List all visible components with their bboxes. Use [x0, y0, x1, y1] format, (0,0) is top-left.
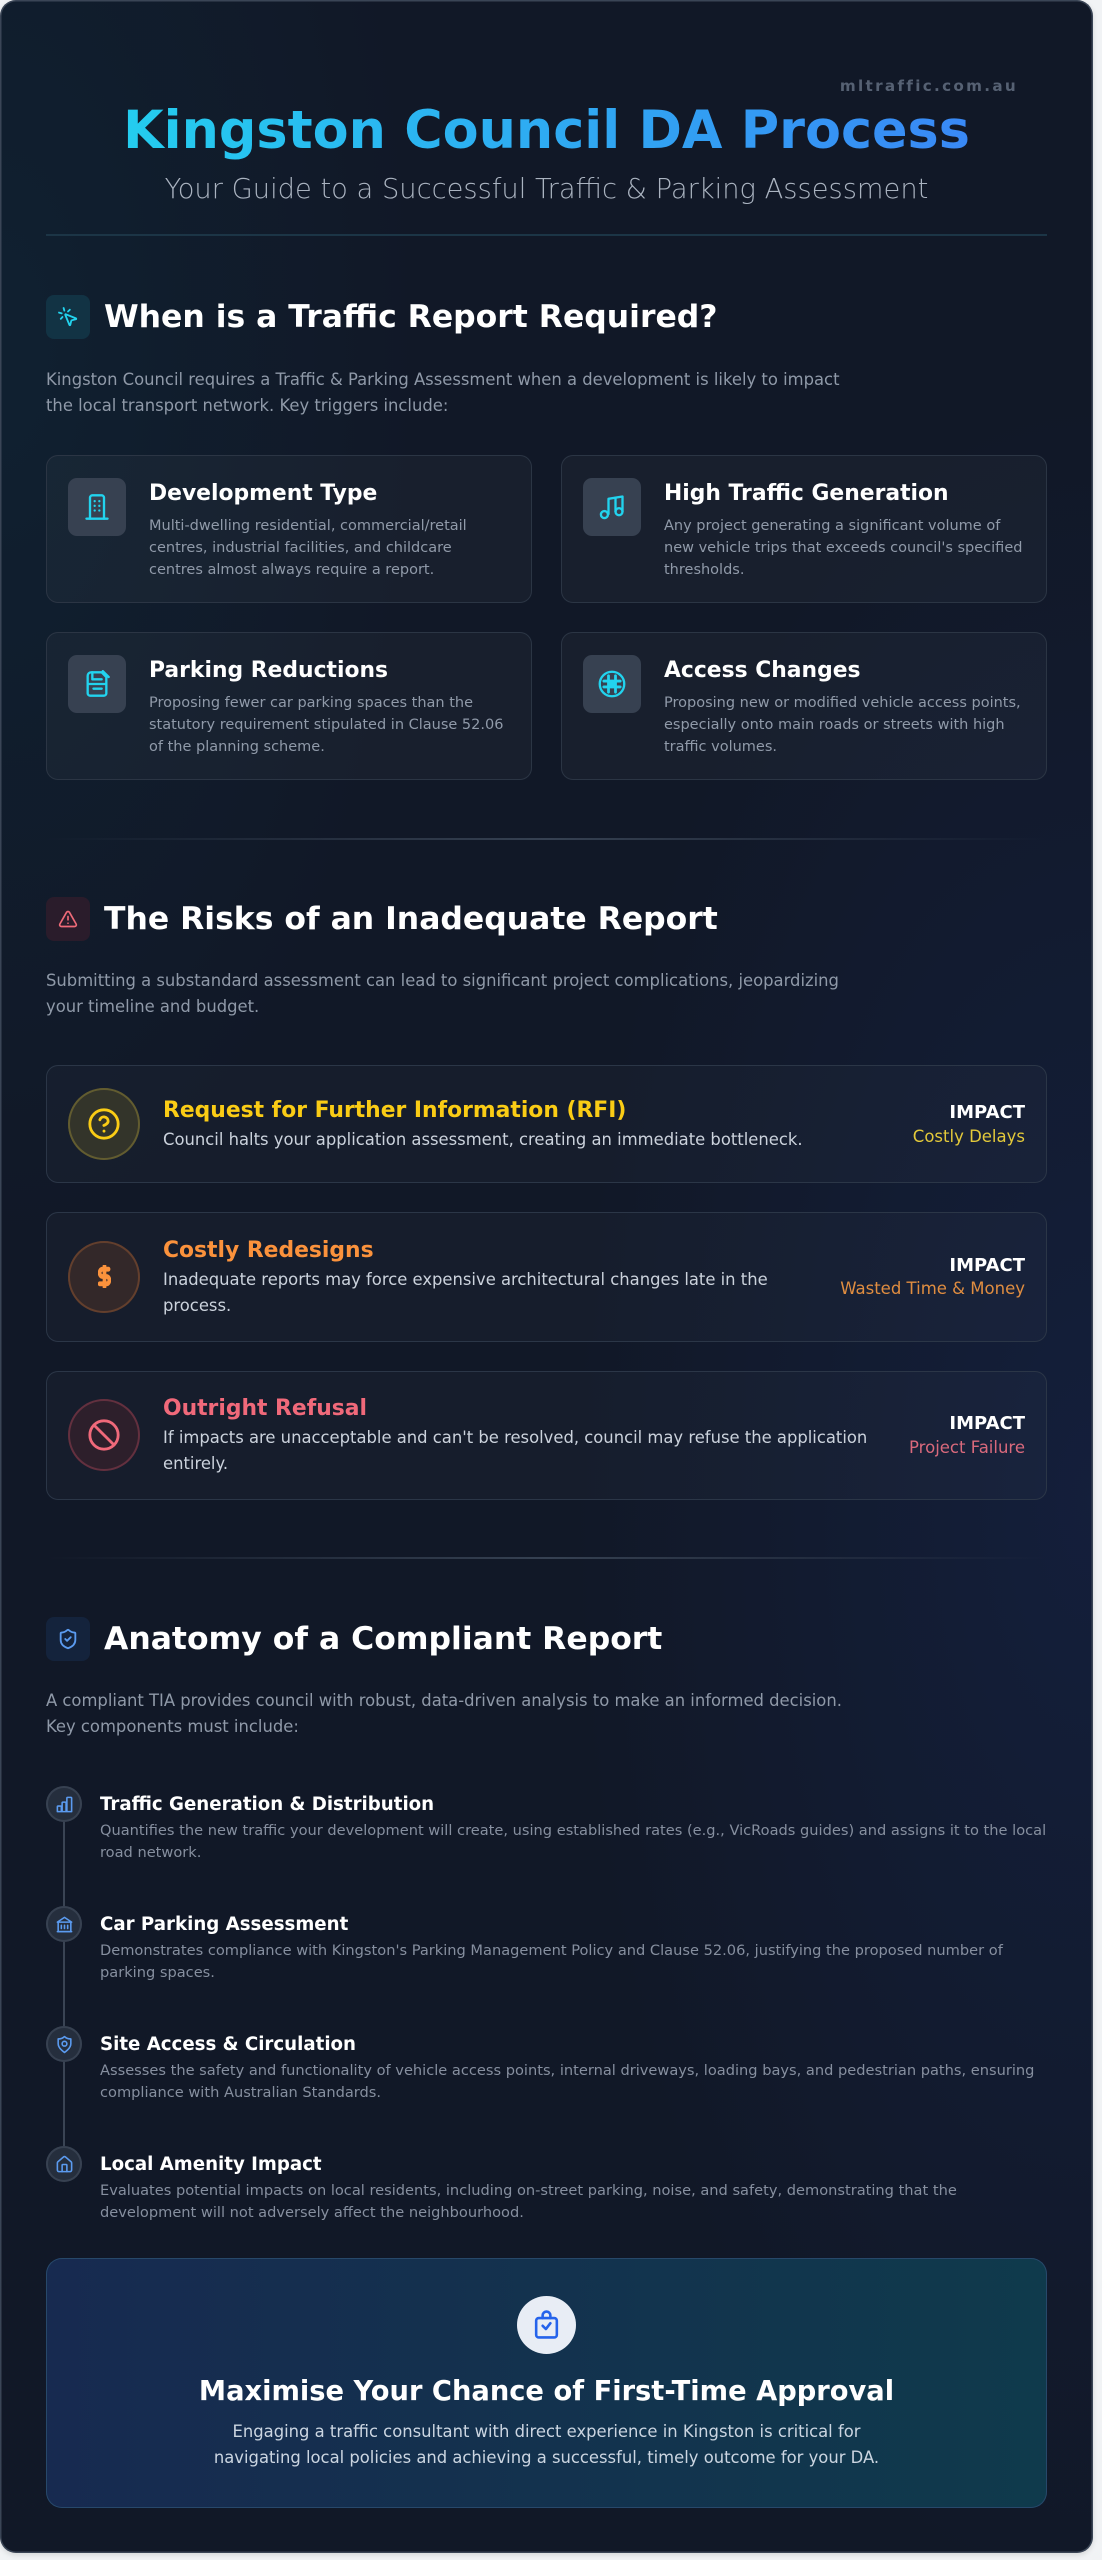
heading: When is a Traffic Report Required?	[104, 299, 718, 335]
card title: High Traffic Generation	[664, 481, 949, 506]
header	[123, 77, 1018, 204]
risk text: Council halts your application assessment, creating an immediate bottleneck.	[163, 1130, 803, 1148]
heading: The Risks of an Inadequate Report	[104, 901, 718, 937]
impact label: IMPACT	[949, 1254, 1025, 1276]
risk text: process.	[163, 1296, 231, 1314]
icon: music notes	[583, 478, 641, 536]
item text	[100, 2062, 1034, 2101]
card text: new vehicle trips that exceeds council's specified	[664, 540, 1022, 556]
impact label: IMPACT	[949, 1412, 1025, 1434]
item text: Assesses the safety and functionality of vehicle access points, internal driveways, loading bays, and pedestrian paths, ensuring	[100, 2062, 1034, 2079]
risk card: RFI	[46, 1065, 1047, 1183]
card title: Access Changes	[664, 658, 861, 683]
item title: Traffic Generation & Distribution	[100, 1794, 434, 1814]
card: parking reductions	[46, 632, 532, 780]
icon: pointer click	[46, 295, 90, 339]
call to action panel	[46, 2258, 1047, 2508]
card text: Any project generating a significant volume of	[664, 518, 1000, 534]
card: high traffic generation	[561, 455, 1047, 603]
icon: question mark	[68, 1088, 140, 1160]
icon: ban	[68, 1399, 140, 1471]
icon: bar chart	[46, 1786, 82, 1822]
timeline item: traffic generation	[46, 1786, 1046, 1861]
card text: centres almost always require a report.	[149, 562, 434, 578]
subtitle: Your Guide to a Successful Traffic & Parking Assessment	[165, 174, 928, 204]
risk text: entirely.	[163, 1454, 228, 1472]
card text	[664, 694, 1021, 754]
cta text: Engaging a traffic consultant with direct experience in Kingston is critical for	[232, 2422, 860, 2441]
item text: Evaluates potential impacts on local residents, including on-street parking, noise, and safety, demonstrating that the	[100, 2182, 957, 2199]
icon: house	[46, 2146, 82, 2182]
intro text: the local transport network. Key triggers include:	[46, 396, 448, 415]
card text	[149, 518, 467, 578]
intro text: Submitting a substandard assessment can lead to significant project complications, jeopardizing	[46, 971, 839, 990]
risk title: Request for Further Information (RFI)	[163, 1098, 626, 1122]
icon: location shield	[46, 2026, 82, 2062]
impact value: Costly Delays	[913, 1126, 1025, 1146]
icon: building	[68, 478, 126, 536]
risk text: Inadequate reports may force expensive architectural changes late in the	[163, 1270, 768, 1288]
timeline item: car parking	[46, 1906, 1004, 1981]
timeline item: site access	[46, 2026, 1034, 2101]
card text: Proposing new or modified vehicle access points,	[664, 694, 1021, 710]
card text: Multi-dwelling residential, commercial/retail	[149, 518, 467, 534]
item text	[100, 1822, 1046, 1861]
item text: parking spaces.	[100, 1964, 215, 1981]
item text: road network.	[100, 1844, 201, 1861]
card text: especially onto main roads or streets with high	[664, 716, 1005, 732]
panel: when is a report required	[46, 295, 1047, 780]
card text: Proposing fewer car parking spaces than the	[149, 694, 473, 710]
item text: development will not adversely affect the neighbourhood.	[100, 2204, 524, 2221]
intro text	[46, 971, 839, 1016]
card text	[149, 694, 503, 754]
icon: shield check	[46, 1617, 90, 1661]
icon: landmark	[46, 1906, 82, 1942]
panel: anatomy of a compliant report	[46, 1617, 1046, 2221]
risk card: refusal	[46, 1371, 1047, 1500]
impact label: IMPACT	[949, 1102, 1025, 1122]
item text: compliance with Australian Standards.	[100, 2084, 381, 2101]
intro text: A compliant TIA provides council with robust, data-driven analysis to make an informed decision.	[46, 1691, 842, 1710]
cta text: navigating local policies and achieving a successful, timely outcome for your DA.	[214, 2448, 879, 2467]
card text: centres, industrial facilities, and childcare	[149, 540, 452, 556]
heading: Anatomy of a Compliant Report	[104, 1621, 662, 1657]
risk title: Outright Refusal	[163, 1396, 367, 1420]
risk text	[163, 1428, 867, 1472]
cta heading: Maximise Your Chance of First-Time Approval	[199, 2376, 894, 2407]
risk title: Costly Redesigns	[163, 1238, 374, 1262]
item text	[100, 2182, 957, 2221]
card: access changes	[561, 632, 1047, 780]
item title: Site Access & Circulation	[100, 2034, 356, 2054]
icon: clipboard check	[517, 2296, 576, 2354]
title: Kingston Council DA Process	[123, 100, 970, 161]
item title: Car Parking Assessment	[100, 1914, 348, 1934]
item text: Demonstrates compliance with Kingston's Parking Management Policy and Clause 52.06, justifying the proposed number of	[100, 1942, 1003, 1959]
intro text	[46, 370, 840, 415]
risk card: redesigns	[46, 1212, 1047, 1342]
timeline item: local amenity	[46, 2146, 957, 2221]
risk text	[163, 1270, 768, 1314]
icon: document	[68, 655, 126, 713]
icon: dollar	[68, 1241, 140, 1313]
item text	[100, 1942, 1004, 1981]
icon: warning triangle	[46, 897, 90, 941]
icon: access circle	[583, 655, 641, 713]
panel: risks of an inadequate report	[46, 897, 1047, 1500]
intro text: Key components must include:	[46, 1717, 299, 1736]
item text: Quantifies the new traffic your development will create, using established rates (e.g., VicRoads guides) and assigns it to the local	[100, 1822, 1046, 1839]
website label: mltraffic.com.au	[840, 77, 1018, 95]
card text: statutory requirement stipulated in Clause 52.06	[149, 716, 503, 732]
item title: Local Amenity Impact	[100, 2154, 322, 2174]
impact value: Wasted Time & Money	[840, 1278, 1025, 1298]
card title: Parking Reductions	[149, 658, 388, 683]
intro text: Kingston Council requires a Traffic & Parking Assessment when a development is likely to impact	[46, 370, 840, 389]
card text: thresholds.	[664, 562, 744, 578]
intro text: your timeline and budget.	[46, 997, 259, 1016]
intro text	[46, 1691, 842, 1736]
card text: traffic volumes.	[664, 738, 777, 754]
risk text: If impacts are unacceptable and can't be resolved, council may refuse the application	[163, 1428, 867, 1446]
card title: Development Type	[149, 481, 377, 506]
card text: of the planning scheme.	[149, 738, 325, 754]
card text	[664, 518, 1022, 578]
impact value: Project Failure	[909, 1438, 1025, 1456]
cta text	[214, 2422, 879, 2467]
card: development type	[46, 455, 532, 603]
